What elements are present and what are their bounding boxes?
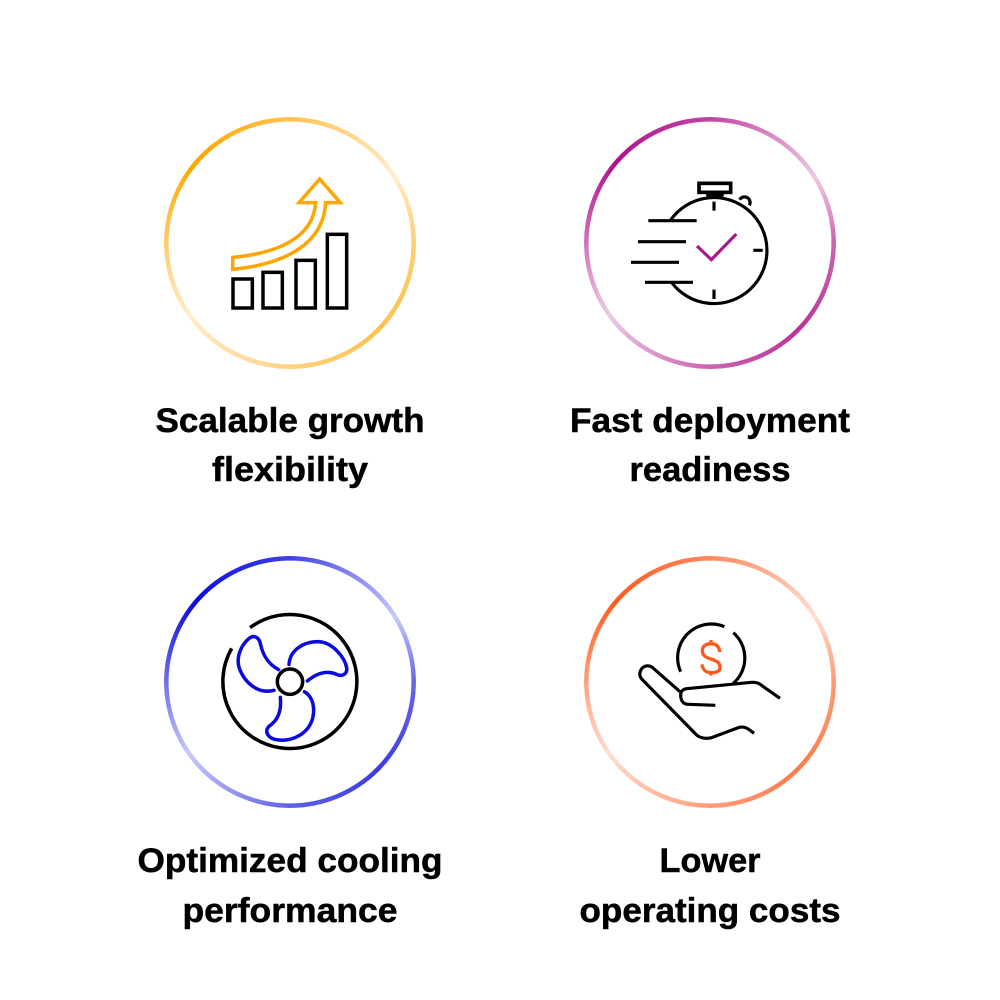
icon: stopwatch with checkmark — [631, 182, 769, 306]
ring: orange gradient circle — [164, 117, 416, 369]
heading: lower operating costs: operating costs — [580, 892, 840, 930]
panel: fast deployment — [570, 117, 850, 489]
ring: blue gradient circle — [164, 556, 416, 808]
heading: optimized cooling performance: performance — [182, 892, 398, 930]
ring: orange-red gradient circle — [584, 556, 836, 808]
panel: optimized cooling — [138, 556, 442, 930]
icon: cooling fan — [221, 612, 359, 750]
icon: hand holding coin — [638, 622, 781, 740]
panel: lower operating costs — [580, 556, 840, 930]
panel: scalable growth — [156, 117, 424, 489]
heading: lower operating costs: Lower — [660, 842, 760, 880]
heading: lower operating costs — [580, 842, 840, 930]
heading: fast deployment readiness: readiness — [630, 451, 790, 489]
icon: rising bars with arrow — [230, 176, 348, 310]
heading: optimized cooling performance — [138, 842, 442, 930]
heading: scalable growth flexibility: Scalable growth — [156, 402, 424, 440]
ring: magenta gradient circle — [584, 116, 836, 368]
heading: fast deployment readiness: Fast deployment — [570, 402, 850, 440]
heading: scalable growth flexibility: flexibility — [212, 451, 368, 489]
heading: fast deployment readiness — [570, 402, 850, 489]
heading: scalable growth flexibility — [156, 402, 424, 489]
heading: optimized cooling performance: Optimized cooling — [138, 842, 442, 880]
